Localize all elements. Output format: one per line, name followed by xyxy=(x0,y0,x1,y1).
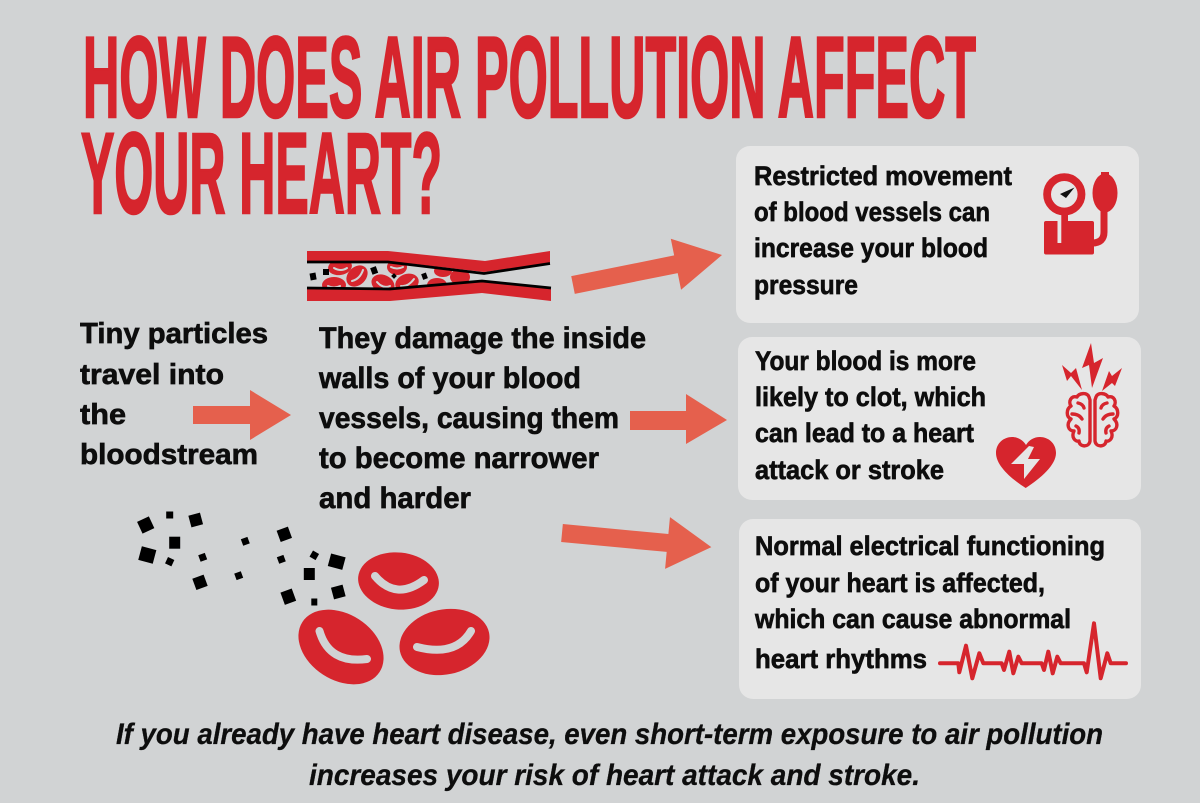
text: tiny particles: the xyxy=(80,399,126,431)
text: tiny particles: travel into xyxy=(80,359,224,391)
closing statement: increases your risk of heart attack and stroke. xyxy=(309,759,920,792)
arrow: to blood clot xyxy=(630,394,727,444)
text: damage to blood vessels: and harder xyxy=(319,482,471,515)
closing statement xyxy=(116,718,1103,792)
text: blood pressure: pressure xyxy=(754,270,858,300)
red blood cells xyxy=(284,548,496,700)
text: blood clot: can lead to a heart xyxy=(755,418,974,448)
closing statement: If you already have heart disease, even short-term exposure to air pollution xyxy=(116,718,1103,751)
text: blood clot: attack or stroke xyxy=(755,455,944,485)
text: damage to blood vessels: to become narrower xyxy=(319,442,599,475)
text: damage to blood vessels: They damage the inside xyxy=(319,322,646,355)
text: damage to blood vessels: vessels, causing them xyxy=(319,402,619,435)
particles xyxy=(137,512,346,606)
icon: blood pressure gauge xyxy=(1044,172,1118,254)
title xyxy=(81,14,976,238)
arrow: particles to damage xyxy=(193,390,291,440)
text: electrical functioning xyxy=(754,531,1105,674)
text: tiny particles: Tiny particles xyxy=(80,318,268,350)
text: electrical functioning: which can cause abnormal xyxy=(754,604,1071,634)
icon: narrowed blood vessel xyxy=(307,251,551,301)
text: electrical functioning: of your heart is affected, xyxy=(755,568,1045,598)
icon: brain with lightning xyxy=(1062,343,1122,446)
illustration: particles and red blood cells xyxy=(137,512,496,700)
arrow: to electrical functioning xyxy=(560,507,714,573)
text: tiny particles xyxy=(80,318,268,471)
text: electrical functioning: Normal electrical functioning xyxy=(755,531,1105,561)
text: blood pressure: increase your blood xyxy=(754,233,988,263)
text: damage to blood vessels xyxy=(318,322,646,515)
text: tiny particles: bloodstream xyxy=(80,439,258,471)
text: blood clot: likely to clot, which xyxy=(755,382,986,412)
panel: blood clot xyxy=(738,337,1141,500)
text: electrical functioning: heart rhythms xyxy=(755,644,927,674)
icon: heartbeat line xyxy=(940,623,1126,678)
text: blood pressure: Restricted movement xyxy=(754,161,1012,191)
title: YOUR HEART? xyxy=(81,110,442,238)
arrow: to blood pressure xyxy=(568,229,727,310)
panel: blood pressure xyxy=(736,146,1139,323)
text: blood clot xyxy=(755,346,986,485)
text: damage to blood vessels: walls of your blood xyxy=(318,362,581,395)
text: blood pressure: of blood vessels can xyxy=(754,197,990,227)
panel: electrical functioning xyxy=(739,519,1141,699)
text: blood clot: Your blood is more xyxy=(755,346,976,376)
icon: broken heart xyxy=(996,437,1056,488)
text: blood pressure xyxy=(754,161,1012,300)
